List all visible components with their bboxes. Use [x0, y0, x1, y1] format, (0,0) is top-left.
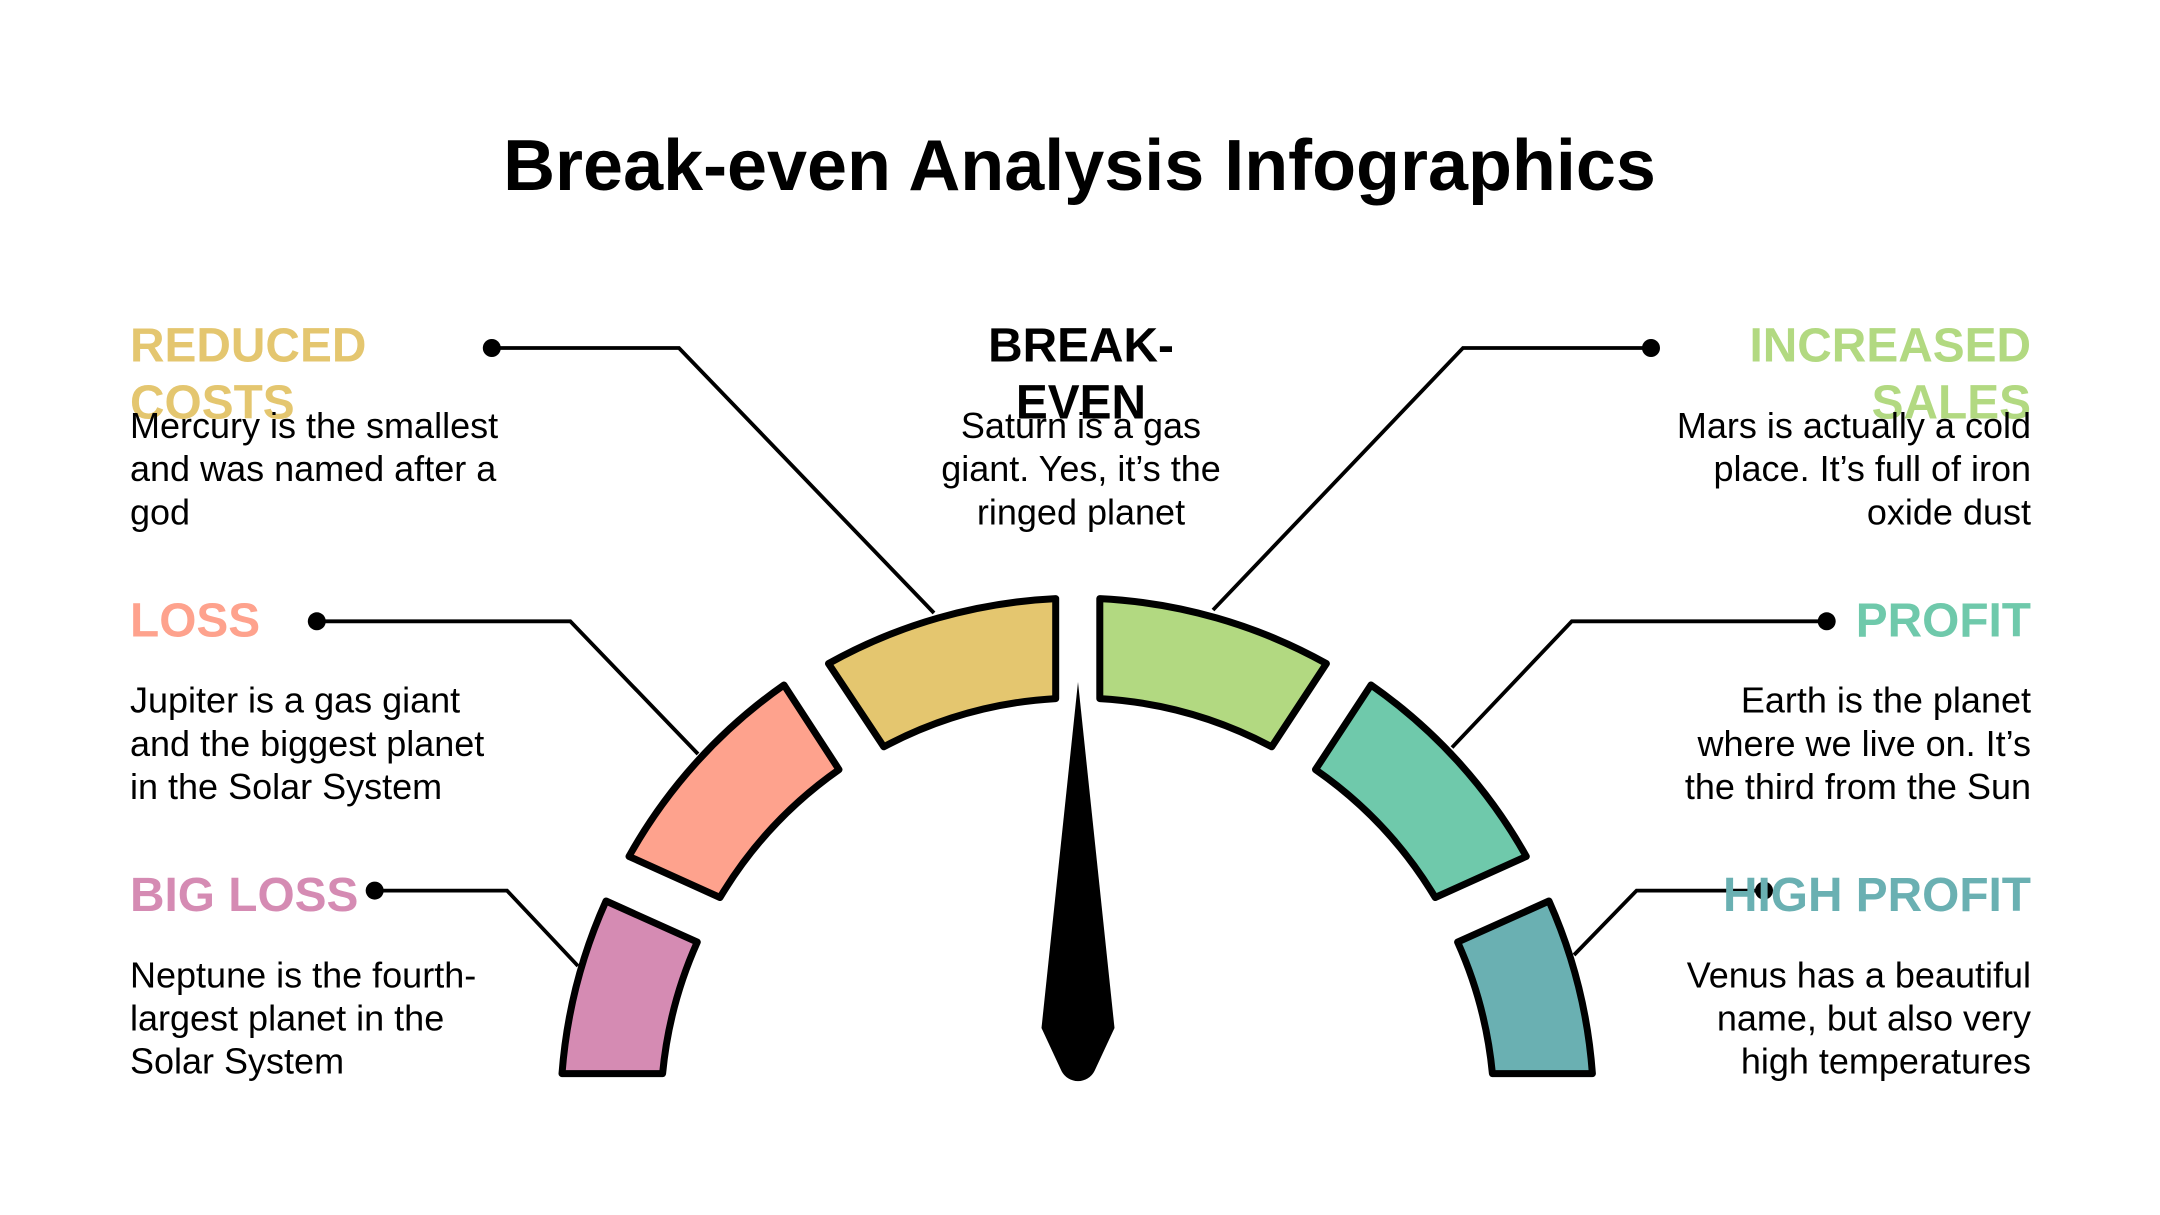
heading: increased sales: INCREASED — [1749, 320, 2031, 373]
text: mercury: god — [130, 491, 190, 532]
leader line: big loss — [366, 882, 578, 966]
text: mars: oxide dust — [1867, 491, 2031, 532]
block: big loss — [130, 869, 476, 1082]
leader line: loss — [308, 612, 698, 754]
heading: high profit: HIGH PROFIT — [1723, 869, 2031, 922]
leader line: reduced costs — [483, 339, 934, 613]
gauge segment: profit — [1316, 685, 1526, 898]
block: high profit — [1687, 869, 2031, 1082]
text: neptune: Neptune is the fourth- — [130, 954, 476, 995]
text: saturn: Saturn is a gas — [961, 405, 1201, 446]
text: earth: where we live on. It’s — [1696, 723, 2031, 764]
heading: big loss: BIG LOSS — [130, 869, 358, 922]
text: mercury: Mercury is the smallest — [130, 405, 498, 446]
gauge segment: big loss — [562, 901, 697, 1074]
text: earth: the third from the Sun — [1685, 766, 2031, 807]
heading: increased sales: SALES — [1872, 376, 2031, 429]
text: neptune: largest planet in the — [130, 998, 444, 1038]
text: venus: Venus has a beautiful — [1687, 954, 2031, 995]
heading: profit: PROFIT — [1856, 594, 2031, 647]
block: loss — [130, 594, 484, 807]
text: neptune: Solar System — [130, 1041, 344, 1082]
gauge segment: loss — [629, 685, 839, 898]
heading: break-even: BREAK- — [988, 320, 1174, 373]
heading: loss: LOSS — [130, 594, 260, 647]
text: earth: Earth is the planet — [1741, 680, 2031, 721]
heading: break-even: EVEN — [1016, 376, 1146, 429]
text: mars: Mars is actually a cold — [1677, 405, 2031, 446]
gauge segment: high profit — [1458, 901, 1592, 1074]
leader line: profit — [1452, 612, 1836, 748]
block: reduced costs — [130, 320, 498, 532]
title: Break-even Analysis Infographics — [503, 126, 1656, 206]
text: saturn: giant. Yes, it’s the — [941, 448, 1221, 489]
text: mars: place. It’s full of iron — [1714, 448, 2031, 489]
gauge segment: increased sales — [1100, 599, 1326, 747]
text: venus: name, but also very — [1717, 998, 2031, 1038]
gauge segment: reduced costs — [828, 599, 1056, 747]
gauge needle — [1042, 682, 1114, 1081]
block: break-even — [941, 320, 1221, 532]
text: jupiter: in the Solar System — [130, 766, 442, 807]
text: jupiter: and the biggest planet — [130, 723, 484, 764]
text: saturn: ringed planet — [977, 491, 1185, 532]
block: profit — [1685, 594, 2031, 807]
leader line: high profit — [1574, 882, 1773, 955]
heading: reduced costs: REDUCED — [130, 320, 366, 373]
text: jupiter: Jupiter is a gas giant — [130, 680, 460, 721]
block: increased sales — [1677, 320, 2031, 532]
heading: reduced costs: COSTS — [130, 376, 295, 429]
text: venus: high temperatures — [1741, 1041, 2031, 1082]
leader line: increased sales — [1213, 339, 1660, 610]
text: mercury: and was named after a — [130, 448, 497, 489]
